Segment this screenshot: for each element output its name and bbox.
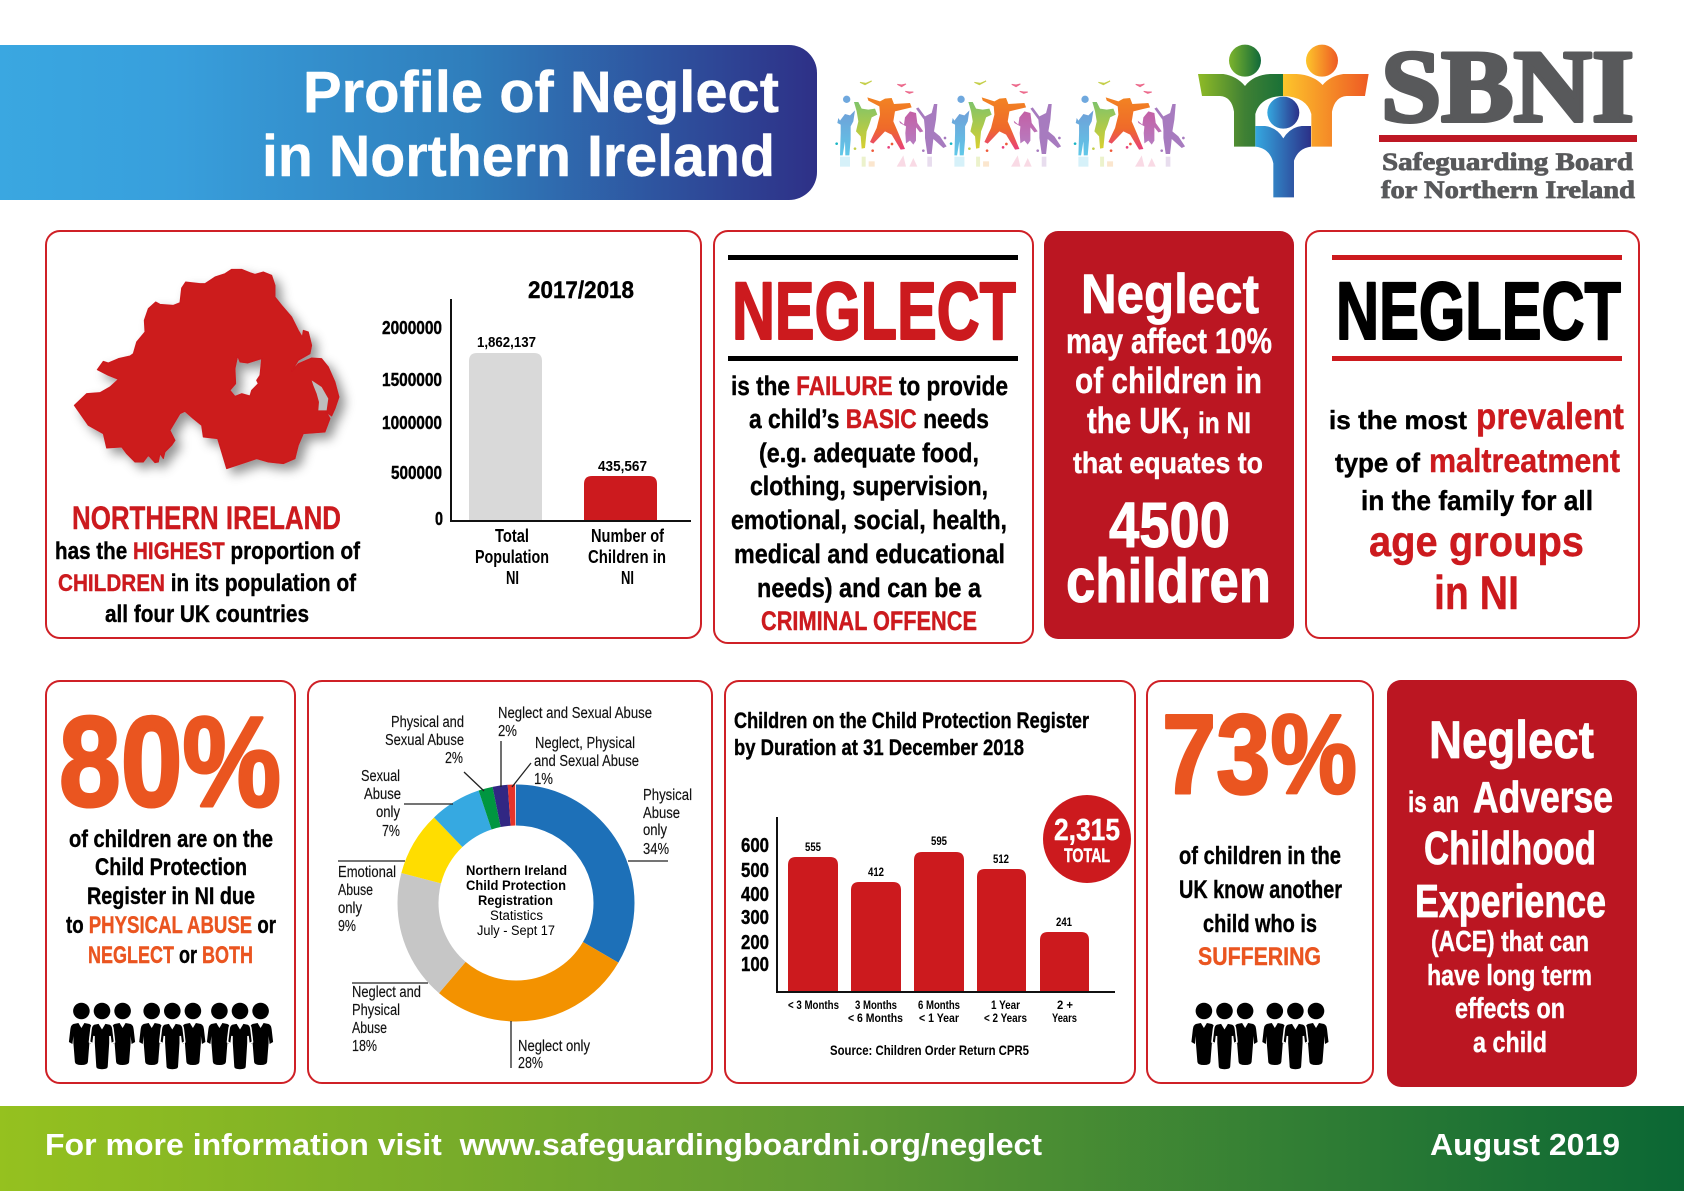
text: child protection register: NEGLECT or BOTH bbox=[88, 942, 253, 969]
panel: may affect 10%: that equates to bbox=[1073, 447, 1263, 480]
donut labels: 18% bbox=[352, 1038, 377, 1055]
donut chart bbox=[418, 805, 614, 1001]
donut labels: Sexual Abuse bbox=[385, 732, 464, 749]
text: prevalence: age groups bbox=[1369, 518, 1584, 566]
panel: adverse childhood experience: (ACE) that can bbox=[1431, 926, 1589, 958]
text: Northern Ireland highest proportion: all four UK countries bbox=[105, 601, 309, 628]
text: prevalence: type of bbox=[1335, 448, 1421, 478]
panel: may affect 10%: may affect 10% bbox=[1066, 322, 1272, 361]
donut labels: Emotional bbox=[338, 864, 396, 881]
text: child protection register: to PHYSICAL ABUSE or bbox=[66, 912, 276, 939]
callout: 2,315 total bbox=[1043, 795, 1131, 883]
donut labels: Abuse bbox=[364, 786, 401, 803]
callout: 2,315 total: 2,315 bbox=[1054, 812, 1120, 847]
panel: may affect 10%: the UK, in NI bbox=[1087, 400, 1251, 441]
text: child protection register: Child Protection bbox=[95, 854, 247, 881]
donut labels: only bbox=[338, 900, 362, 917]
icon: dancing children silhouettes bbox=[835, 81, 1185, 167]
bar chart: duration: 241 bbox=[1056, 917, 1073, 929]
donut labels: 9% bbox=[338, 918, 356, 935]
bar chart: population 2017/2018: 2017/2018 bbox=[528, 277, 634, 304]
donut centre label bbox=[466, 863, 567, 938]
chart title: Children on the Child Protection Register bbox=[734, 708, 1089, 733]
text: definition: needs) and can be a bbox=[757, 573, 981, 603]
donut labels: Neglect, Physical bbox=[535, 735, 635, 752]
footer date: August 2019 bbox=[1430, 1127, 1620, 1162]
panel: adverse childhood experience: Adverse bbox=[1473, 773, 1613, 822]
bar chart: population 2017/2018: Children in bbox=[588, 547, 666, 567]
panel: donut chart registration statistics bbox=[308, 681, 712, 1083]
bar chart: duration: 512 bbox=[993, 854, 1009, 866]
panel: 80% of children bbox=[46, 681, 295, 1083]
panel: Northern Ireland population bbox=[46, 231, 701, 638]
text: Northern Ireland highest proportion: NORTHERN IRELAND bbox=[72, 500, 341, 536]
stat: 73%: 73% bbox=[1162, 691, 1357, 817]
text: child protection register bbox=[66, 826, 276, 969]
donut centre label: Registration bbox=[478, 893, 553, 908]
chart title: by Duration at 31 December 2018 bbox=[734, 735, 1024, 760]
donut labels: 2% bbox=[445, 750, 463, 767]
bar chart: duration: 100 bbox=[741, 954, 769, 976]
panel: adverse childhood experience: Experience bbox=[1415, 875, 1606, 927]
bar chart: duration: < 3 Months bbox=[788, 998, 839, 1012]
heading: NEGLECT: NEGLECT bbox=[732, 266, 1016, 357]
text: prevalence bbox=[1329, 396, 1624, 619]
bar chart: population 2017/2018: 500000 bbox=[391, 463, 442, 483]
map of Northern Ireland bbox=[74, 269, 339, 469]
panel: adverse childhood experience: have long term bbox=[1427, 960, 1592, 992]
donut labels: Neglect and Sexual Abuse bbox=[498, 705, 652, 722]
bar chart: duration: < 1 Year bbox=[919, 1011, 959, 1025]
panel: may affect 10%: of children in bbox=[1075, 360, 1262, 401]
donut centre label: Statistics bbox=[490, 908, 543, 923]
text: know another child: SUFFERING bbox=[1198, 943, 1321, 971]
bar chart: duration: 500 bbox=[741, 860, 769, 882]
bar chart: population 2017/2018: NI bbox=[621, 568, 634, 588]
bar chart: population 2017/2018: 1000000 bbox=[382, 413, 442, 433]
footer link: For more information visit www.safeguardingboardni.org/neglect bbox=[45, 1127, 1042, 1162]
panel: may affect 10% bbox=[1044, 231, 1294, 639]
bar chart: duration: 1 Year bbox=[991, 998, 1020, 1012]
text: prevalence: in the family for all bbox=[1361, 485, 1593, 516]
panel: adverse childhood experience: is an bbox=[1408, 786, 1459, 819]
donut labels: Neglect only bbox=[518, 1038, 590, 1055]
text: Northern Ireland highest proportion bbox=[55, 500, 361, 628]
donut labels: Physical and bbox=[391, 714, 464, 731]
title: in Northern Ireland bbox=[262, 124, 775, 189]
icon: SBNI figures bbox=[1198, 45, 1369, 197]
text: definition: a child’s BASIC needs bbox=[749, 404, 989, 434]
footer banner bbox=[0, 1106, 1684, 1191]
panel: 73% of children bbox=[1147, 681, 1373, 1083]
bar chart: duration: < 6 Months bbox=[848, 1011, 903, 1025]
bar chart: duration: 6 Months bbox=[918, 998, 960, 1012]
donut labels: Sexual bbox=[361, 768, 400, 785]
panel: adverse childhood experience: a child bbox=[1473, 1027, 1547, 1059]
panel: adverse childhood experience: Neglect bbox=[1429, 711, 1594, 770]
donut centre label: Northern Ireland bbox=[466, 863, 567, 878]
donut labels: only bbox=[376, 804, 400, 821]
bar chart: duration: 600 bbox=[741, 835, 769, 857]
text: source: Source: Children Order Return CPR5 bbox=[830, 1042, 1029, 1058]
text: know another child: of children in the bbox=[1179, 842, 1341, 870]
bar chart: population 2017/2018: Number of bbox=[591, 526, 665, 546]
logo: SBNI Safeguarding Board for Northern Ireland bbox=[1198, 30, 1637, 204]
donut labels: 7% bbox=[382, 823, 400, 840]
text: Northern Ireland highest proportion: CHILDREN in its population of bbox=[58, 570, 357, 597]
logo: SBNI Safeguarding Board for Northern Ireland: for Northern Ireland bbox=[1381, 177, 1635, 204]
text: definition: emotional, social, health, bbox=[731, 505, 1007, 535]
text: child protection register: Register in NI due bbox=[87, 883, 255, 910]
text: prevalence: maltreatment bbox=[1429, 442, 1620, 479]
panel: most prevalent maltreatment bbox=[1306, 231, 1639, 638]
bar chart: population 2017/2018: Population bbox=[475, 547, 549, 567]
donut labels: 2% bbox=[498, 723, 517, 740]
title: Profile of Neglect bbox=[303, 60, 779, 125]
text: prevalence: prevalent bbox=[1476, 396, 1624, 437]
text: prevalence: is the most bbox=[1329, 405, 1467, 435]
panel: adverse childhood experience: effects on bbox=[1455, 993, 1565, 1025]
bar chart: duration: 2 + bbox=[1057, 998, 1073, 1012]
title bbox=[262, 60, 779, 189]
donut labels: Neglect and bbox=[352, 984, 421, 1001]
icon: group of people bbox=[1191, 1003, 1328, 1070]
donut labels: 1% bbox=[534, 771, 553, 788]
panel: may affect 10%: Neglect bbox=[1081, 262, 1259, 325]
donut labels: Abuse bbox=[352, 1020, 387, 1037]
text: definition: medical and educational bbox=[734, 539, 1005, 569]
bar chart: duration: 412 bbox=[868, 867, 884, 879]
panel: register by duration bbox=[725, 681, 1135, 1083]
stat: 80%: 80% bbox=[59, 691, 281, 834]
bar chart: duration: 3 Months bbox=[855, 998, 897, 1012]
text: know another child bbox=[1179, 842, 1342, 971]
chart title bbox=[734, 708, 1089, 760]
text: definition: (e.g. adequate food, bbox=[759, 438, 979, 468]
bar chart: duration: 555 bbox=[805, 842, 822, 854]
donut labels: Physical bbox=[352, 1002, 400, 1019]
bar chart: population 2017/2018 bbox=[382, 277, 691, 588]
donut centre label: July - Sept 17 bbox=[477, 923, 555, 938]
bar chart: population 2017/2018: NI bbox=[506, 568, 519, 588]
bar chart: population 2017/2018: 435,567 bbox=[598, 458, 647, 475]
donut labels: and Sexual Abuse bbox=[534, 753, 639, 770]
text: definition bbox=[731, 371, 1008, 636]
donut labels: Physical bbox=[643, 787, 692, 804]
donut labels: only bbox=[643, 822, 667, 839]
panel: may affect 10%: 4500 bbox=[1109, 489, 1230, 561]
text: definition: clothing, supervision, bbox=[750, 471, 988, 501]
logo: SBNI Safeguarding Board for Northern Ireland: SBNI bbox=[1381, 30, 1634, 144]
donut labels: 34% bbox=[643, 841, 669, 858]
text: know another child: UK know another bbox=[1179, 876, 1342, 904]
bar chart: duration: 300 bbox=[741, 907, 769, 929]
donut labels: 28% bbox=[518, 1055, 543, 1072]
text: definition: is the FAILURE to provide bbox=[731, 371, 1008, 401]
bar chart: duration: 200 bbox=[741, 932, 769, 954]
donut labels: Abuse bbox=[338, 882, 373, 899]
panel: may affect 10%: children bbox=[1066, 547, 1271, 616]
text: Northern Ireland highest proportion: has the HIGHEST proportion of bbox=[55, 538, 361, 565]
logo: SBNI Safeguarding Board for Northern Ireland: Safeguarding Board bbox=[1382, 149, 1633, 176]
bar chart: duration: 595 bbox=[931, 836, 948, 848]
panel: adverse childhood experience bbox=[1387, 680, 1637, 1087]
donut labels bbox=[338, 705, 692, 1072]
donut labels: Abuse bbox=[643, 805, 680, 822]
text: child protection register: of children are on the bbox=[69, 826, 273, 853]
bar chart: duration bbox=[741, 817, 1115, 1025]
bar chart: population 2017/2018: 2000000 bbox=[382, 318, 442, 338]
bar chart: population 2017/2018: Total bbox=[495, 526, 529, 546]
bar chart: duration: Years bbox=[1052, 1011, 1077, 1025]
text: prevalence: in NI bbox=[1434, 566, 1519, 619]
callout: 2,315 total: TOTAL bbox=[1064, 846, 1110, 867]
text: know another child: child who is bbox=[1203, 910, 1317, 938]
donut centre label: Child Protection bbox=[466, 878, 566, 893]
bar chart: population 2017/2018: 0 bbox=[435, 509, 443, 529]
icon: group of people bbox=[69, 1003, 273, 1070]
panel: adverse childhood experience: Childhood bbox=[1424, 822, 1596, 874]
bar chart: population 2017/2018: 1500000 bbox=[382, 370, 442, 390]
bar chart: population 2017/2018: 1,862,137 bbox=[477, 334, 536, 351]
text: definition: CRIMINAL OFFENCE bbox=[761, 606, 977, 636]
title banner bbox=[0, 45, 817, 200]
bar chart: duration: < 2 Years bbox=[984, 1011, 1027, 1025]
panel: neglect definition bbox=[714, 231, 1033, 643]
bar chart: duration: 400 bbox=[741, 884, 769, 906]
donut leader lines bbox=[338, 741, 668, 1068]
